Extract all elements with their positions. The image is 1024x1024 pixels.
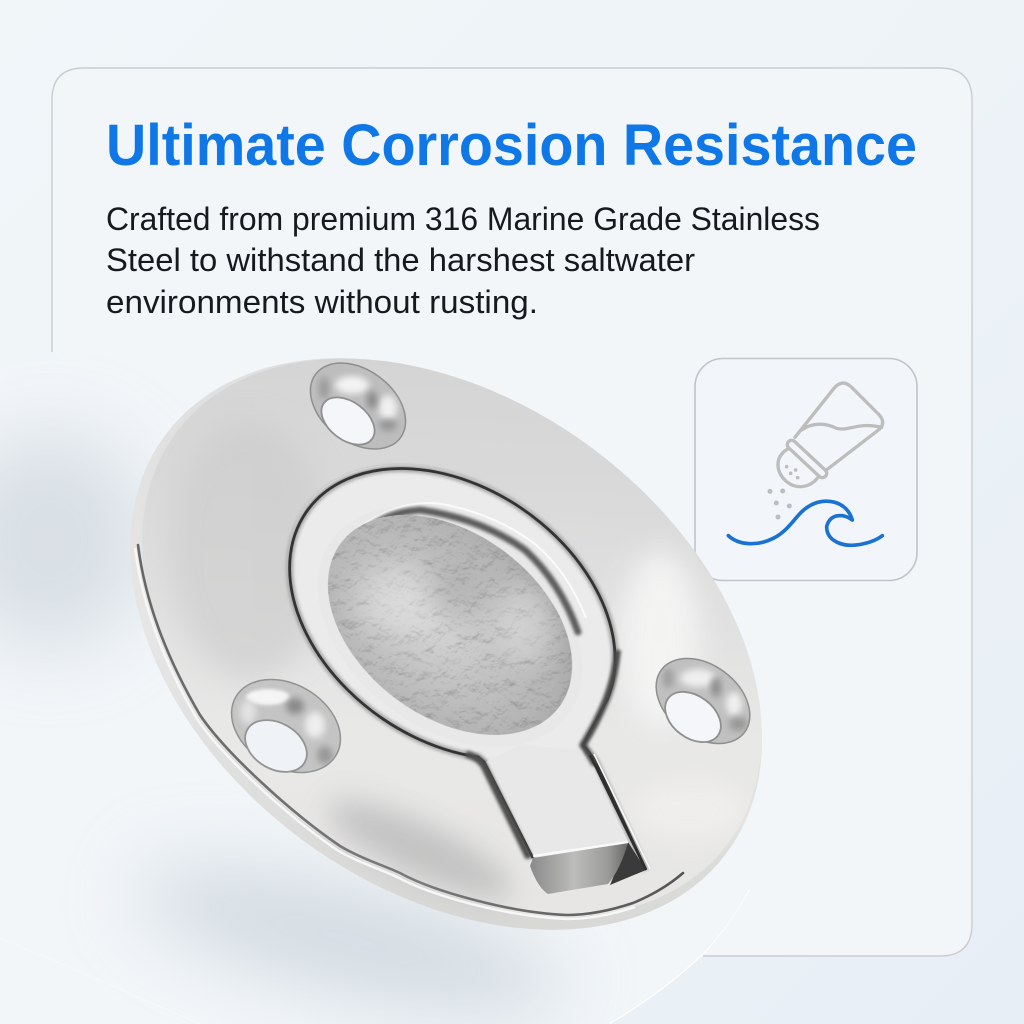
body line 2: Steel to withstand the harshest saltwater — [106, 242, 695, 278]
ring groove shadow — [290, 469, 646, 870]
screw hole: right — [655, 658, 751, 744]
bowl recess lip — [272, 458, 628, 796]
ring groove highlight — [288, 466, 614, 754]
through hole — [236, 710, 316, 782]
disc surface — [565, 911, 701, 1024]
panel: text card — [52, 68, 972, 956]
through hole — [313, 388, 383, 454]
through hole — [656, 682, 730, 752]
tab edge highlight — [533, 842, 628, 856]
countersink reflections — [319, 376, 397, 431]
screw hole: top — [310, 362, 406, 450]
product: round stainless flush ring pull — [130, 358, 762, 930]
soft shadow bottom — [138, 844, 564, 1024]
plate rim — [20, 240, 872, 1024]
countersink — [294, 345, 422, 467]
countersink reflections — [663, 668, 747, 731]
countersink — [640, 641, 766, 761]
ring face — [290, 469, 646, 893]
tab front face — [530, 843, 628, 894]
bowl upper rim highlight — [358, 503, 586, 618]
tab left shadow — [466, 754, 529, 858]
bowl: textured recess — [286, 470, 614, 780]
countersink reflections — [240, 689, 333, 764]
countersink — [215, 661, 357, 791]
tab slot dark wedge — [610, 842, 646, 885]
plate edge line — [138, 545, 683, 915]
tab right edge — [590, 755, 646, 870]
ring groove dark line — [290, 469, 646, 870]
bowl light patches — [357, 560, 553, 665]
title: Ultimate Corrosion Resistance — [106, 113, 917, 178]
ring right band shadow — [583, 650, 618, 765]
tab right edge highlight — [594, 754, 650, 869]
body line 1: Crafted from premium 316 Marine Grade Stainless — [106, 201, 820, 237]
plate face — [35, 243, 869, 1024]
body line 3: environments without rusting. — [106, 284, 538, 320]
body text — [106, 201, 820, 320]
white backdrop disc with soft shadows — [0, 428, 750, 1024]
bowl upper rim shadow — [338, 510, 578, 632]
tab top face — [486, 745, 628, 855]
icon: wave — [728, 501, 882, 545]
icon: salt shaker — [767, 383, 883, 519]
icon panel: salt shaker and wave — [695, 358, 917, 580]
plate edge highlight — [135, 548, 635, 919]
icon frame — [695, 358, 917, 580]
plate shading — [170, 420, 750, 916]
disc edge highlight — [610, 890, 750, 1024]
soft shadow left — [0, 430, 150, 650]
screw hole: left — [230, 678, 342, 774]
faint lower curve — [0, 938, 200, 1024]
